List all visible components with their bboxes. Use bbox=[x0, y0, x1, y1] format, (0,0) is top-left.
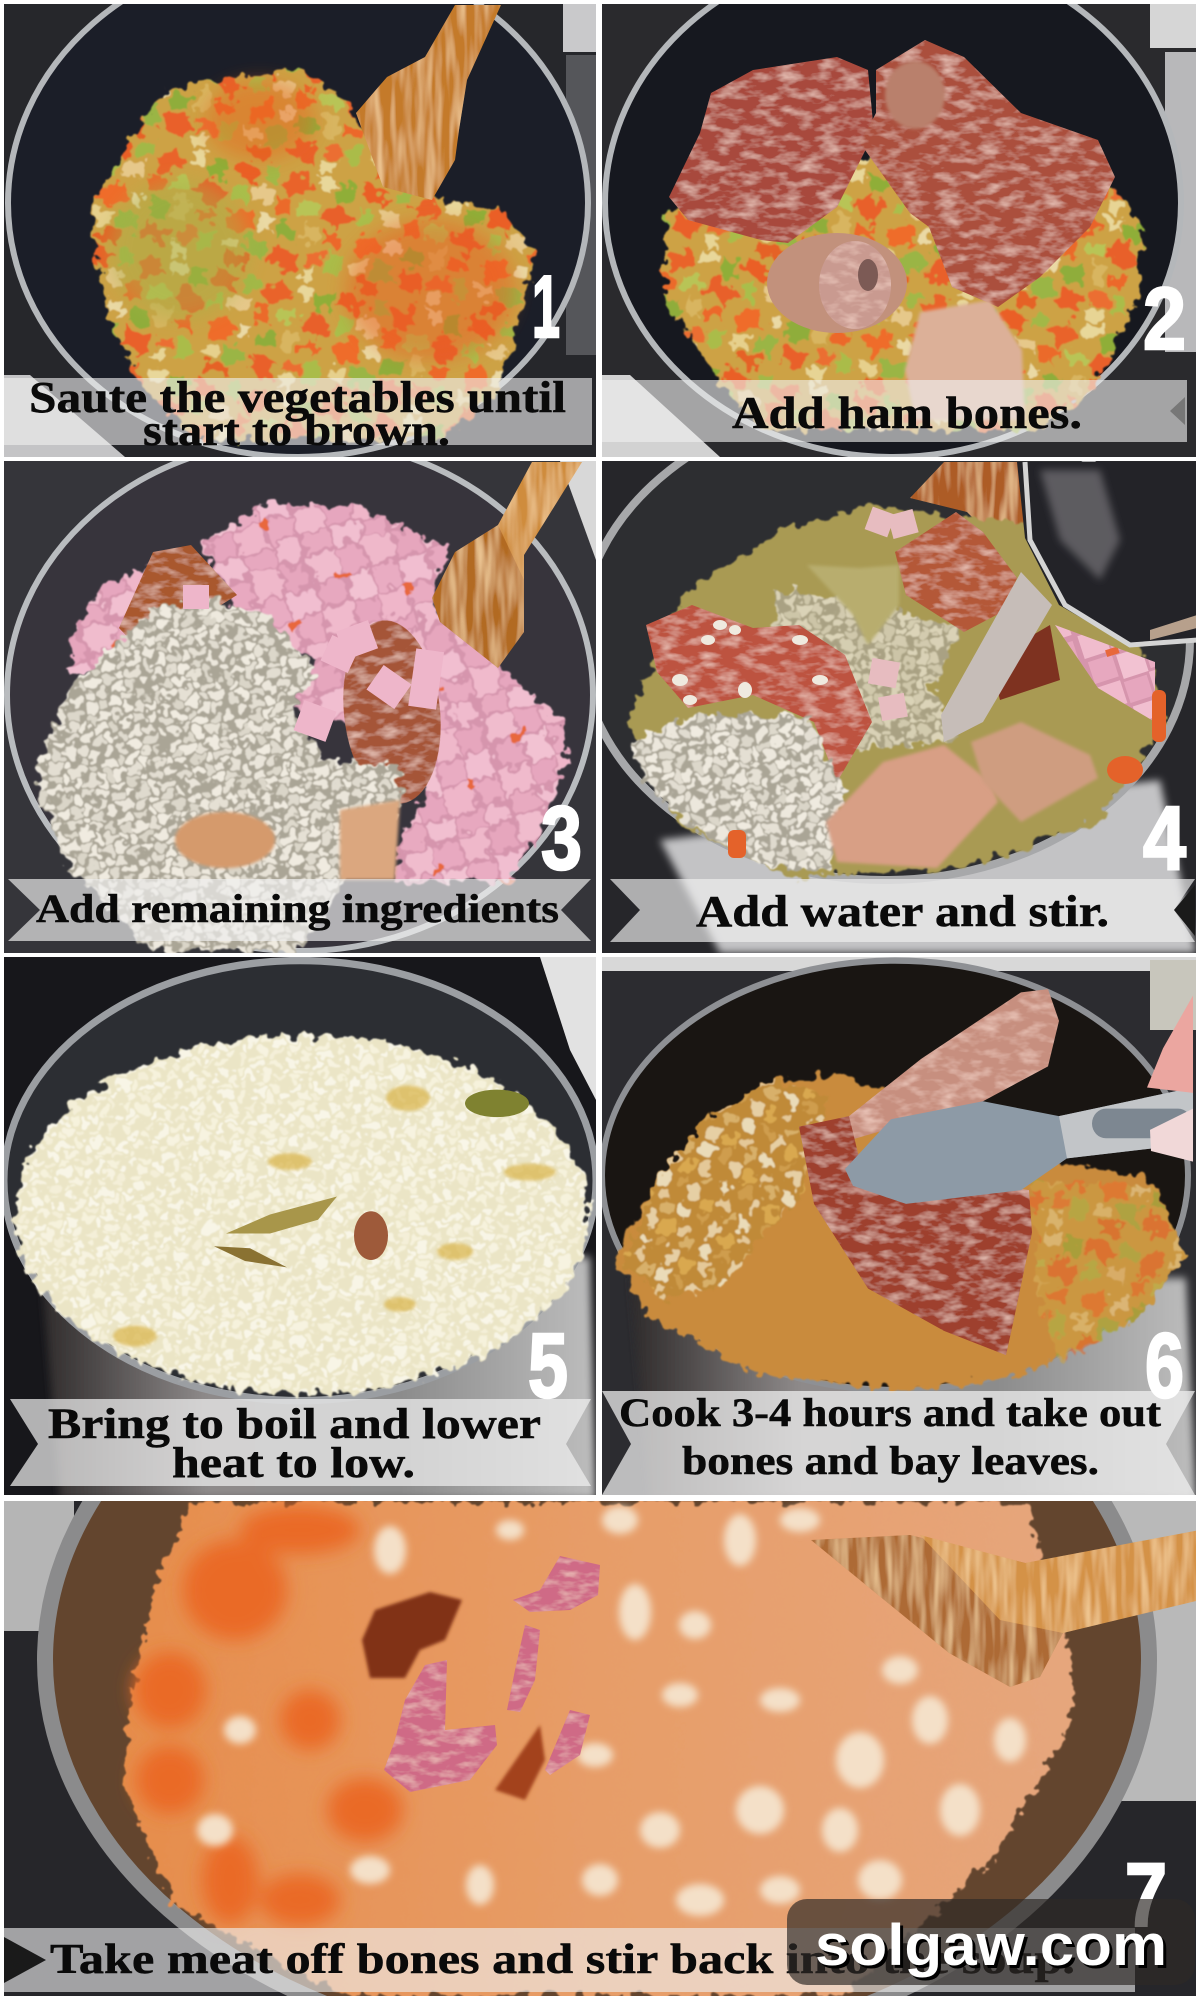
diced ham left bbox=[70, 560, 210, 672]
navy beans bbox=[631, 715, 845, 872]
meat bbox=[799, 1116, 1032, 1355]
dark meat right bbox=[990, 625, 1060, 700]
icon: pot rim bbox=[602, 961, 1188, 1390]
caption ribbon: Take meat off bones and stir back into the soup. bbox=[50, 1937, 1075, 1983]
step number 5: 5 bbox=[528, 1315, 568, 1417]
diced ham right bbox=[203, 502, 566, 882]
smoked sausage bbox=[362, 1592, 462, 1678]
caption ribbon: heat to low. bbox=[172, 1440, 415, 1487]
bay leaf bbox=[226, 1196, 337, 1234]
icon: pot rim bbox=[45, 1265, 1149, 2000]
icon: pan bbox=[8, 0, 588, 457]
pale ham cubes bbox=[865, 507, 919, 721]
panel: step 6 take out bones bbox=[602, 957, 1196, 1500]
ham bone left bbox=[669, 57, 874, 243]
ham hock right bbox=[971, 722, 1098, 822]
white beans bbox=[197, 1506, 1026, 1916]
caption ribbon bbox=[4, 1928, 1135, 1992]
step number 4: 4 bbox=[1143, 789, 1186, 889]
wooden spoon bbox=[432, 462, 582, 668]
broth bbox=[627, 505, 1166, 878]
caption ribbon bbox=[4, 378, 592, 446]
panel: step 7 finished soup bbox=[4, 1265, 1200, 2000]
icon: pan bbox=[605, 0, 1181, 457]
caption ribbon: bones and bay leaves. bbox=[682, 1438, 1099, 1483]
caption ribbon bbox=[602, 1390, 1195, 1495]
smoked meat left bbox=[646, 605, 872, 782]
icon: pot bbox=[580, 400, 1190, 880]
hand bbox=[1147, 995, 1193, 1162]
soup bbox=[126, 1502, 1071, 1996]
vegetable mix bbox=[665, 150, 1143, 430]
scattered beans on meat bbox=[672, 620, 828, 705]
caption ribbon: Bring to boil and lower bbox=[48, 1401, 541, 1448]
caption ribbon bbox=[610, 879, 1195, 942]
caption ribbon: Add remaining ingredients bbox=[36, 886, 559, 931]
sausage lower bbox=[495, 1725, 545, 1800]
smoked meat upper bbox=[895, 512, 1017, 632]
caption ribbon: Add ham bones. bbox=[732, 387, 1082, 438]
tongs bbox=[845, 1088, 1193, 1204]
carrot pieces bbox=[728, 690, 1166, 858]
caption ribbon bbox=[8, 879, 591, 941]
ham hocks bbox=[175, 800, 400, 880]
water stream bbox=[941, 572, 1052, 742]
caption ribbon: start to brown. bbox=[143, 406, 450, 455]
caption ribbon bbox=[602, 380, 1187, 442]
panel: step 5 bring to boil bbox=[4, 957, 596, 1500]
step number 1: 1 bbox=[532, 257, 560, 356]
carrot patches bbox=[134, 1506, 403, 1926]
diced ham bbox=[1055, 625, 1155, 722]
icon: pot rim bbox=[4, 961, 596, 1401]
pot body bbox=[40, 1257, 596, 1500]
caption ribbon: Add water and stir. bbox=[696, 887, 1109, 936]
vegetable mix bbox=[92, 70, 536, 440]
watermark: solgaw.com bbox=[815, 1913, 1167, 1978]
step number 2: 2 bbox=[1143, 269, 1186, 368]
caption ribbon: Cook 3-4 hours and take out bbox=[619, 1390, 1162, 1435]
navy beans bbox=[38, 598, 402, 952]
caption ribbon: Saute the vegetables until bbox=[29, 373, 566, 422]
beans in broth left bbox=[625, 1080, 830, 1299]
panel: step 2 add ham bones bbox=[602, 0, 1196, 457]
watermark bbox=[787, 1899, 1195, 1985]
beans and carrots right bbox=[1030, 1183, 1186, 1363]
sausage pieces bbox=[119, 545, 237, 636]
icon: pan bbox=[7, 439, 593, 951]
ham bone right bbox=[860, 40, 1115, 307]
wooden spoon bbox=[910, 462, 1071, 535]
ham hock left bbox=[826, 745, 998, 868]
step number 3: 3 bbox=[541, 789, 582, 889]
panel: step 3 add remaining ingredients bbox=[4, 439, 596, 953]
caption ribbon bbox=[10, 1399, 591, 1487]
glass jug bbox=[1017, 462, 1197, 645]
pot photo bbox=[602, 961, 1196, 1500]
soup broth bbox=[615, 1074, 1186, 1391]
green bay leaf top bbox=[465, 1090, 529, 1117]
sausage piece bbox=[354, 1211, 388, 1260]
step number 6: 6 bbox=[1145, 1315, 1184, 1417]
ham chips on sausage bbox=[183, 585, 444, 742]
panel: step 1 saute vegetables bbox=[4, 0, 596, 457]
beans in broth bbox=[770, 590, 960, 750]
boiling soup bbox=[15, 1035, 589, 1394]
colour zones bbox=[110, 80, 515, 360]
shredded ham bbox=[384, 1556, 600, 1792]
ham hock bbox=[767, 233, 907, 333]
wooden spoon bbox=[356, 5, 501, 200]
bay leaf lower bbox=[214, 1246, 287, 1267]
panel: step 4 add water and stir bbox=[602, 461, 1196, 953]
knuckle on right bone bbox=[885, 61, 945, 129]
rib bone bbox=[849, 989, 1059, 1140]
oil patches bbox=[113, 1085, 556, 1347]
step number 7: 7 bbox=[1125, 1846, 1167, 1946]
wooden spoon bbox=[811, 1530, 1200, 1687]
bay leaf bbox=[807, 565, 899, 645]
pot body bbox=[630, 1278, 1196, 1500]
pot photo bbox=[4, 961, 596, 1500]
sausage centre bbox=[343, 620, 441, 804]
ham hock lower bbox=[905, 300, 1025, 420]
